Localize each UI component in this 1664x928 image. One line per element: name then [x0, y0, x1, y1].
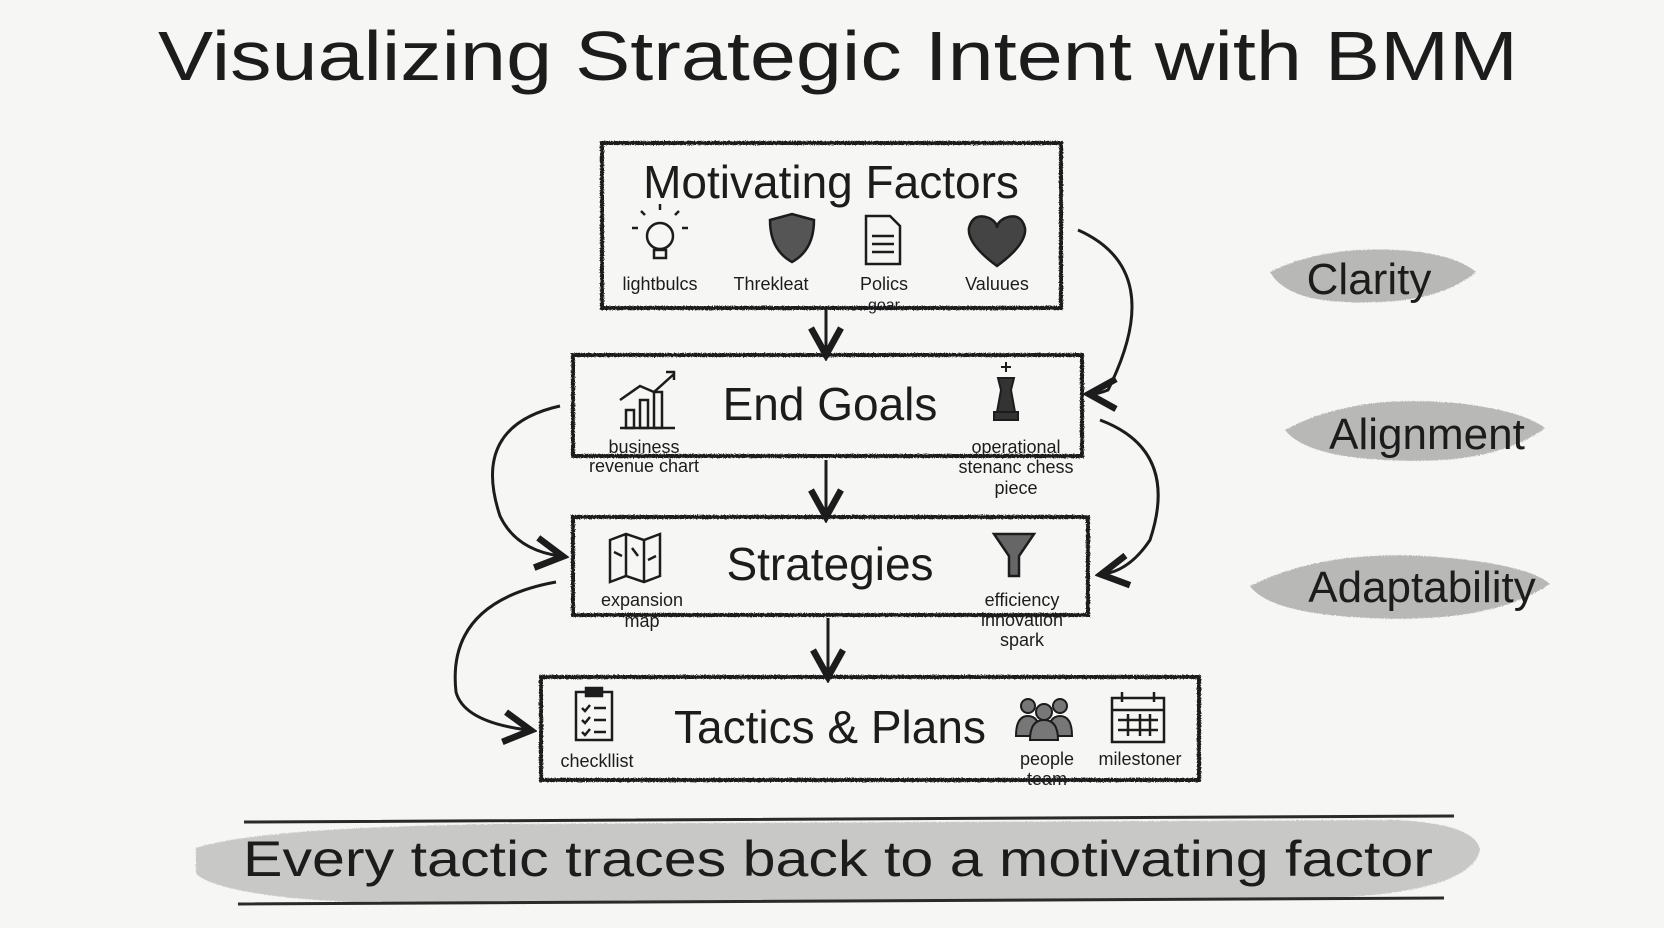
arrow: strategies to tactics	[826, 618, 830, 674]
icon: document	[866, 216, 900, 264]
icon: funnel	[994, 534, 1034, 576]
label: clarity	[1270, 250, 1476, 304]
panel: tactics & plans: Tactics & Plans	[674, 701, 986, 753]
panel: strategies: spark	[1000, 630, 1045, 650]
label: clarity: Clarity	[1307, 255, 1431, 304]
icon: map	[610, 534, 660, 582]
panel: end goals: business	[608, 437, 680, 457]
panel: tactics & plans	[541, 677, 1199, 789]
icon: revenue chart	[620, 372, 675, 428]
panel: strategies	[573, 517, 1088, 650]
panel: end goals: operational	[971, 437, 1061, 457]
icon: checklist	[576, 688, 612, 740]
panel: motivating factors: goar	[868, 297, 901, 314]
panel: end goals: End Goals	[723, 378, 937, 430]
panel: strategies: innovation	[981, 610, 1063, 630]
arrow: right curve motivating to end goals	[1078, 230, 1132, 394]
panel: tactics & plans: team	[1027, 769, 1067, 789]
arrow: left curve end goals to strategies	[492, 406, 560, 556]
label: alignment	[1285, 401, 1545, 461]
label: alignment: Alignment	[1329, 410, 1525, 459]
label: adaptability: Adaptability	[1308, 563, 1536, 612]
panel: end goals	[573, 355, 1082, 498]
icon: shield	[770, 214, 814, 262]
panel: end goals: revenue chart	[589, 456, 699, 476]
icon: lightbulb	[632, 204, 688, 258]
icon: calendar	[1112, 692, 1164, 742]
label: adaptability	[1250, 555, 1550, 619]
icon: heart	[969, 216, 1025, 266]
panel: motivating factors: Threkleat	[733, 274, 809, 294]
panel: motivating factors: Polics	[860, 274, 908, 294]
panel: end goals: stenanc chess	[958, 457, 1074, 477]
arrow: right curve end goals to strategies	[1100, 420, 1158, 574]
arrow: end goals to strategies	[824, 460, 828, 514]
panel: tactics & plans: people	[1020, 749, 1074, 769]
arrow: left curve strategies to tactics	[455, 582, 556, 730]
icon: people team	[1016, 699, 1072, 740]
panel: end goals: piece	[994, 478, 1038, 498]
title: Visualizing Strategic Intent with BMM	[158, 17, 1518, 95]
panel: strategies: map	[624, 611, 660, 631]
panel: strategies: Strategies	[726, 538, 934, 590]
panel: motivating factors: Motivating Factors	[643, 156, 1019, 208]
panel: tactics & plans: checkllist	[560, 751, 634, 771]
panel: motivating factors: Valuues	[965, 274, 1029, 294]
panel: strategies: expansion	[601, 590, 683, 610]
icon: chess piece	[994, 362, 1018, 420]
panel: motivating factors	[602, 143, 1061, 314]
callout: bottom banner	[196, 816, 1480, 904]
callout: bottom banner: Every tactic traces back to a motivating factor	[243, 831, 1433, 887]
arrow: motivating to end goals	[824, 308, 828, 352]
panel: tactics & plans: milestoner	[1098, 749, 1182, 769]
panel: motivating factors: lightbulcs	[622, 274, 698, 294]
panel: strategies: efficiency	[985, 590, 1059, 610]
